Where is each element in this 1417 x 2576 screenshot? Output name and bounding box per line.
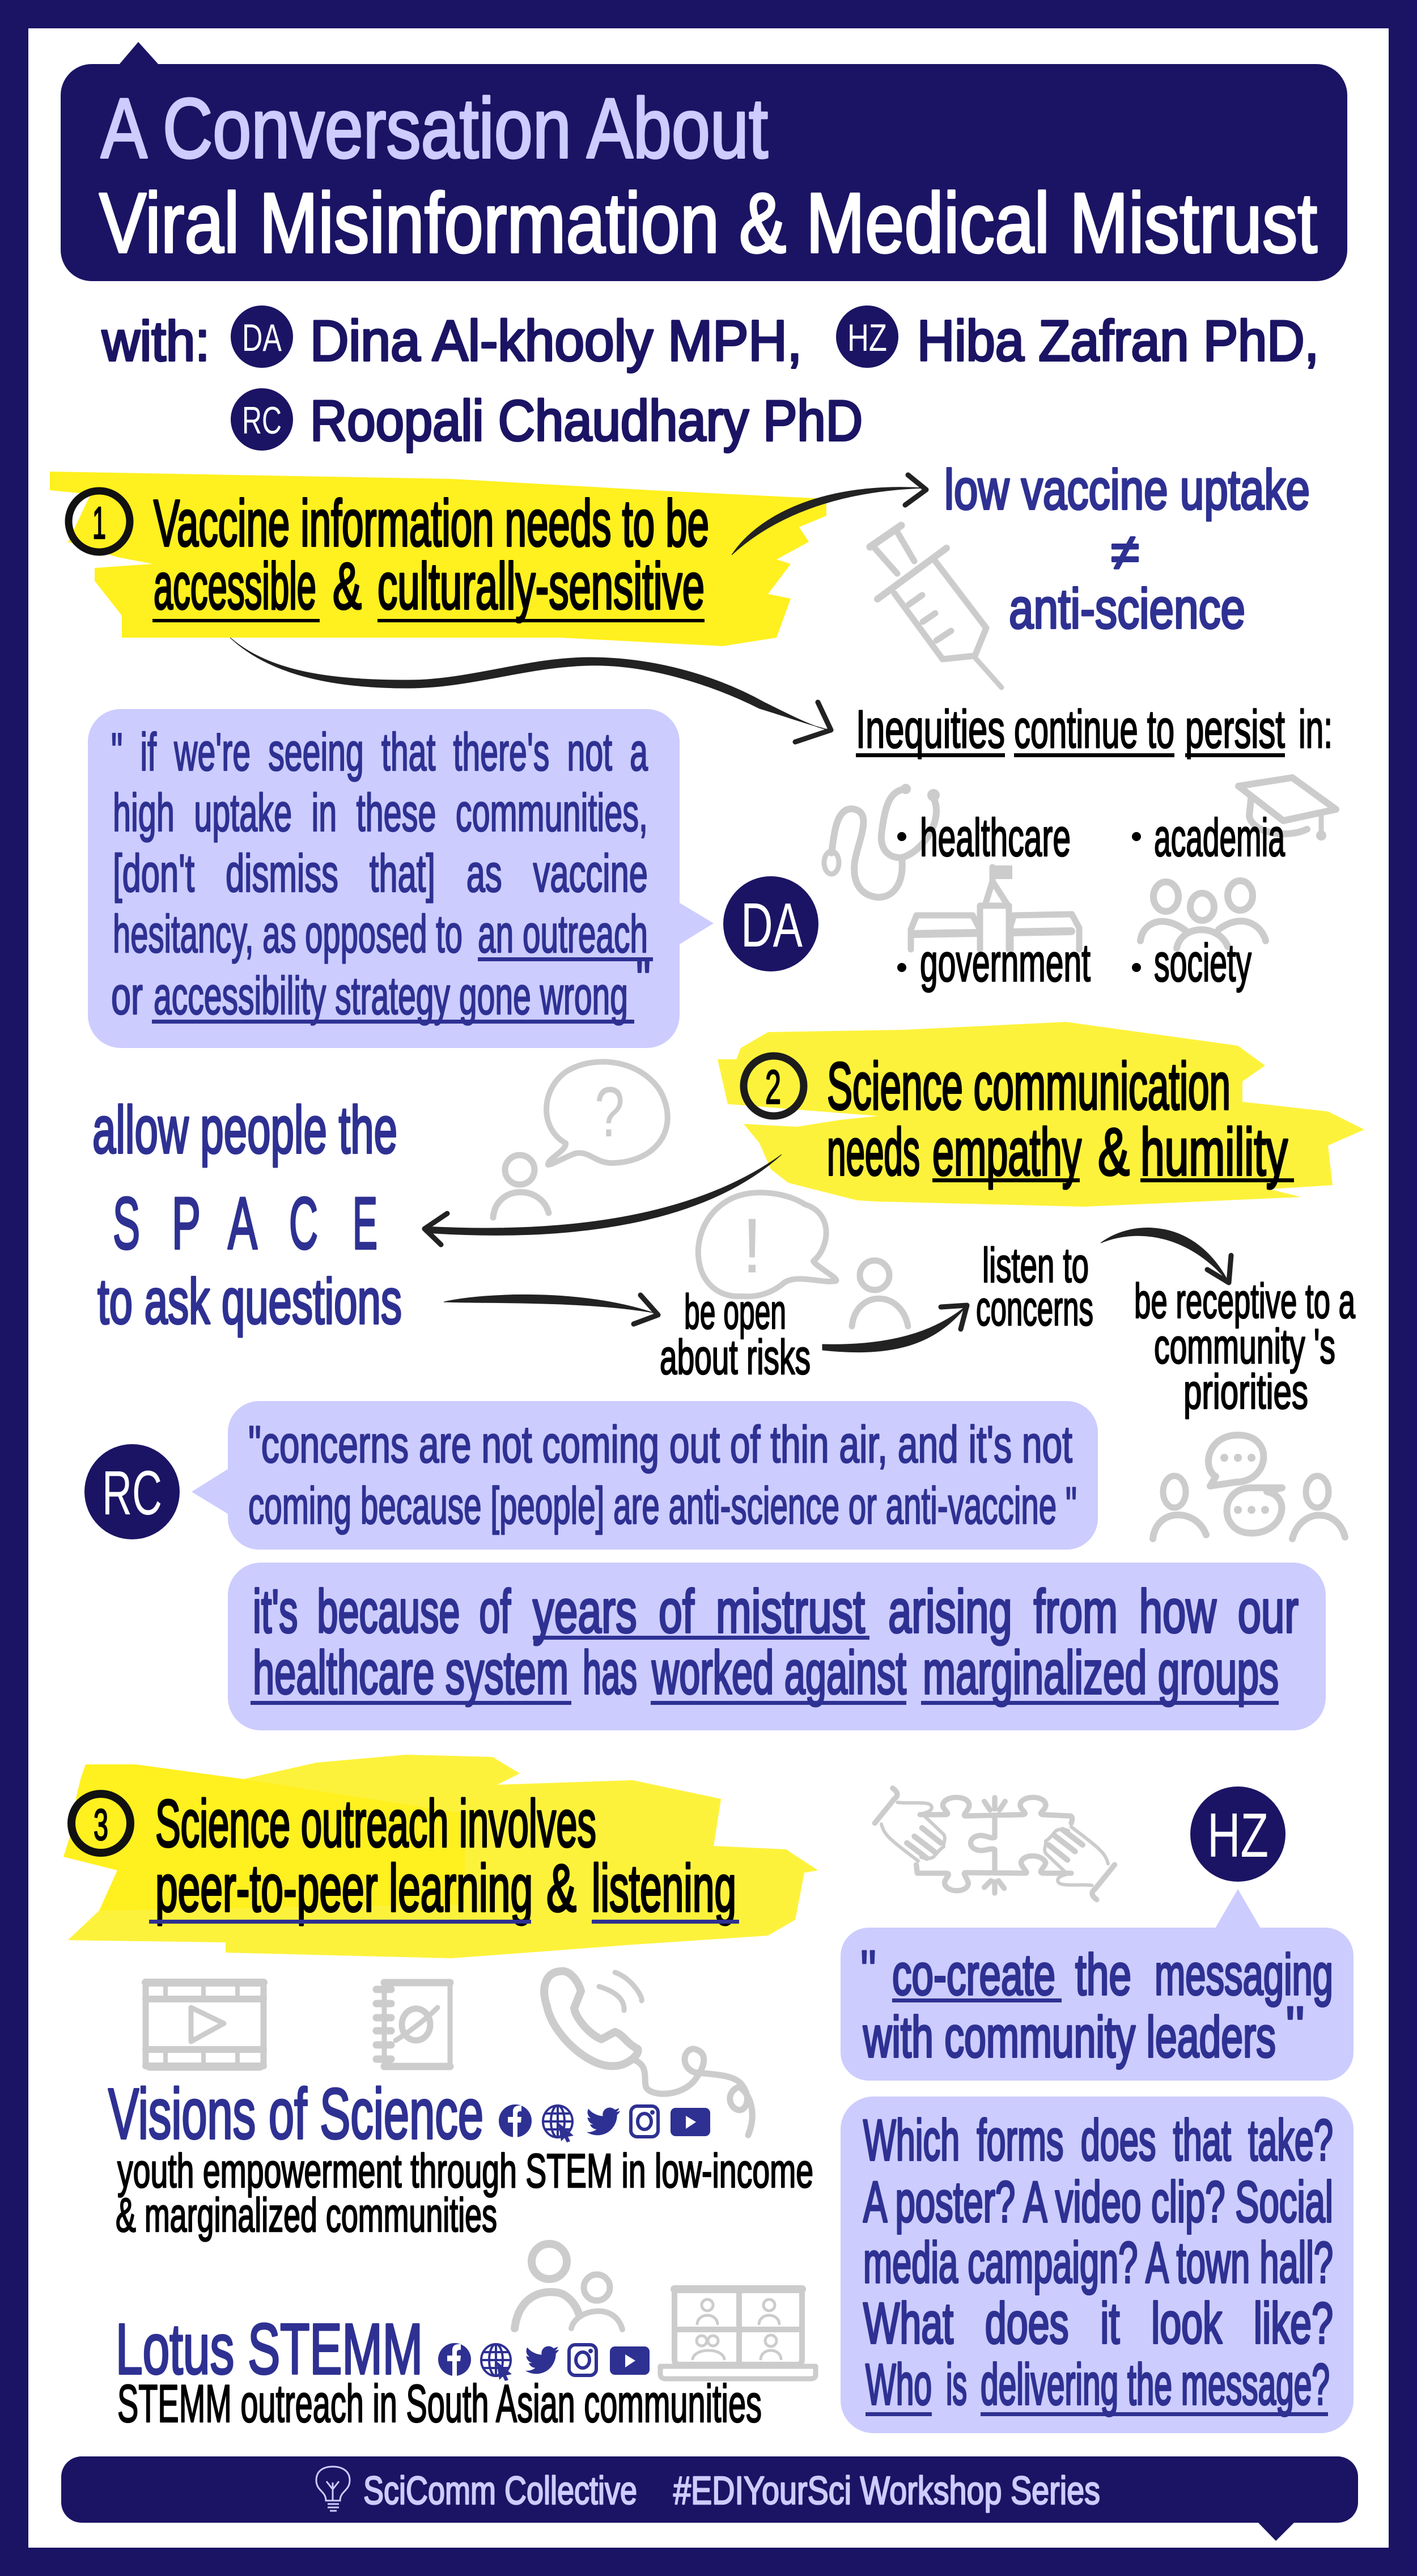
icon: lightbulb <box>316 2467 350 2511</box>
text: receptive to priorities: priorities <box>1183 1365 1308 1419</box>
panel: forms of messaging questions: Who <box>866 2352 932 2417</box>
speaker badge: DA: DA <box>741 890 803 960</box>
heading: inequities: persist <box>1185 699 1285 759</box>
text: receptive to priorities <box>1134 1274 1355 1419</box>
footer banner <box>61 2456 1358 2541</box>
section 3 heading: Science outreach involves <box>155 1786 596 1861</box>
yellow brush highlight <box>63 1755 818 1958</box>
badge: DA <box>231 305 293 368</box>
icon: puzzle hands <box>875 1788 1115 1900</box>
quote panel: Dina: [don't dismiss that] as vaccine <box>113 843 648 903</box>
line: needs empathy and humility: needs <box>827 1115 920 1190</box>
list: inequity areas: healthcare <box>920 808 1071 867</box>
word: SPACE: A <box>228 1182 257 1264</box>
text: Lotus description: STEMM outreach in South Asian communities <box>117 2374 762 2433</box>
line: needs empathy and humility: humility <box>1140 1115 1288 1190</box>
badge: RC <box>231 388 293 451</box>
text: be open about risks: be open <box>684 1285 786 1339</box>
section 2 heading <box>718 1022 1364 1207</box>
panel: years of mistrust: worked against <box>651 1638 906 1707</box>
list: inequity areas: government <box>920 933 1091 992</box>
yellow brush highlight <box>718 1022 1364 1207</box>
icon: syringe <box>870 525 1002 688</box>
icon: exclamation bubble with person: ! <box>742 1203 762 1289</box>
text: allow people the space: to ask questions <box>97 1266 402 1337</box>
speaker badge: RC <box>84 1444 180 1539</box>
panel: years of mistrust: years of mistrust <box>533 1577 865 1645</box>
icon: two people <box>515 2244 622 2329</box>
number badge 2 <box>744 1056 804 1116</box>
quote panel: Roopali: "concerns are not coming out of thin air, and it's not <box>248 1416 1072 1474</box>
icon: community conversation <box>1153 1435 1345 1539</box>
line: needs empathy and humility: empathy <box>932 1115 1081 1190</box>
icon: graduation cap <box>1238 778 1336 841</box>
speaker badge: DA <box>723 876 818 971</box>
icon: government building <box>911 865 1079 949</box>
speakers: with: <box>101 309 210 372</box>
badge: RC: RC <box>242 399 282 442</box>
number badge 3: 3 <box>94 1800 108 1849</box>
heading: inequities: in: <box>1299 699 1333 759</box>
line: accessible and culturally-sensitive <box>154 549 705 623</box>
icon: video player <box>146 1983 264 2068</box>
number badge 3 <box>71 1794 130 1853</box>
yellow brush highlight <box>50 472 826 646</box>
icon: video call laptop <box>660 2288 816 2379</box>
line: accessible and culturally-sensitive: culturally-sensitive <box>377 549 705 623</box>
word: SPACE: P <box>172 1182 201 1264</box>
footer series text: #EDIYourSci Workshop Series <box>673 2468 1100 2513</box>
badge: HZ <box>836 305 898 368</box>
badge: DA: DA <box>242 316 282 359</box>
heading: inequities: continue to <box>1014 699 1174 759</box>
panel: years of mistrust <box>228 1563 1326 1730</box>
quote panel: Dina: hesitancy, as opposed to <box>113 904 463 964</box>
text: listen to concerns: listen to <box>982 1238 1089 1293</box>
quote panel: Dina: or <box>111 966 143 1025</box>
section 3 heading <box>63 1755 818 1958</box>
speakers <box>101 305 1319 453</box>
arrow: to listen to concerns <box>822 1305 967 1352</box>
callout: low uptake is not anti-science: anti-science <box>1009 577 1245 640</box>
text: allow people the space: allow people the <box>92 1093 397 1168</box>
icons: Visions social links <box>499 2104 710 2142</box>
number badge 2: 2 <box>765 1060 781 1114</box>
line: peer-to-peer learning and listening: peer-to-peer learning <box>155 1851 533 1926</box>
list: inequity areas <box>897 808 1285 992</box>
quote panel: Hiba <box>841 1889 1354 2081</box>
list: inequity areas: society <box>1154 933 1251 992</box>
arrow: to community priorities <box>1101 1228 1231 1283</box>
quote panel: Hiba: the <box>1075 1942 1131 2007</box>
panel: forms of messaging questions: is <box>946 2352 967 2417</box>
icon: question bubble with person: ? <box>595 1073 625 1152</box>
line: accessible and culturally-sensitive: & <box>333 549 362 623</box>
quote panel: Hiba: " <box>1286 1995 1305 2059</box>
speaker name: Hiba: Hiba Zafran PhD, <box>917 309 1319 373</box>
line: peer-to-peer learning and listening: & <box>546 1851 576 1926</box>
quote panel: Dina: " <box>636 949 651 1009</box>
speaker badge: HZ <box>1190 1786 1286 1882</box>
title line 1: A Conversation About <box>101 80 768 176</box>
word: SPACE: C <box>289 1182 318 1264</box>
speaker name: Roopali: Roopali Chaudhary PhD <box>310 389 863 453</box>
badge: HZ: HZ <box>847 316 887 359</box>
text: allow people the space <box>92 1093 402 1337</box>
word: SPACE <box>113 1182 377 1264</box>
heading: inequities: Inequities <box>856 699 1005 759</box>
arrow: to be open <box>444 1295 658 1324</box>
heading: Visions of Science: Visions of Science <box>108 2074 483 2154</box>
heading: Lotus STEMM: Lotus STEMM <box>116 2309 423 2389</box>
line: needs empathy and humility: & <box>1098 1115 1130 1190</box>
panel: years of mistrust: it's because of <box>253 1577 511 1645</box>
number badge 1: 1 <box>92 498 106 548</box>
speaker badge: HZ: HZ <box>1207 1801 1268 1870</box>
list: inequity areas: academia <box>1154 808 1285 867</box>
quote panel: Hiba: co-create <box>892 1942 1055 2007</box>
text: listen to concerns: concerns <box>976 1281 1093 1336</box>
quote panel: Dina <box>88 709 714 1048</box>
callout: low uptake is not anti-science: low vaccine uptake <box>944 458 1310 521</box>
text: Visions description: & marginalized communities <box>116 2188 497 2242</box>
number badge 1 <box>69 491 130 552</box>
callout: low uptake is not anti-science <box>944 458 1310 640</box>
section 1 heading: Vaccine information needs to be <box>154 486 709 560</box>
line: accessible and culturally-sensitive: accessible <box>154 549 316 623</box>
panel: years of mistrust: healthcare system <box>253 1638 569 1707</box>
word: SPACE: S <box>113 1182 140 1264</box>
icon: notebook with planet <box>376 1983 450 2066</box>
heading: inequities <box>856 699 1333 759</box>
icon: stethoscope <box>824 784 940 897</box>
quote panel: Dina: accessibility strategy gone wrong <box>154 966 628 1025</box>
speaker badge: RC: RC <box>102 1458 162 1528</box>
speaker name: Dina: Dina Al-khooly MPH, <box>310 309 802 373</box>
icon: society group <box>1140 881 1266 948</box>
line: peer-to-peer learning and listening: listening <box>592 1851 736 1926</box>
text: be open about risks: about risks <box>660 1330 811 1385</box>
callout: low uptake is not anti-science: ≠ <box>1111 524 1139 581</box>
quote panel: Dina: an outreach <box>478 904 648 964</box>
quote panel: Hiba: " <box>860 1938 876 2003</box>
line: needs empathy and humility <box>827 1115 1288 1190</box>
quote panel: Dina: " if we're seeing that there's not a <box>111 722 648 782</box>
icon: telephone <box>544 1971 752 2135</box>
icons: Lotus social links <box>438 2343 650 2381</box>
panel: forms of messaging questions <box>841 2097 1354 2433</box>
word: SPACE: E <box>353 1182 377 1264</box>
icon: exclamation bubble with person <box>698 1192 908 1326</box>
arrow: to inequities <box>230 638 831 742</box>
icon: question bubble with person <box>493 1062 668 1217</box>
quote panel: Roopali <box>192 1401 1098 1550</box>
text: Visions description <box>116 2144 813 2242</box>
text: be open about risks <box>660 1285 811 1385</box>
arrow: to SPACE <box>425 1155 782 1245</box>
title banner <box>61 42 1347 281</box>
quote panel: Dina: high uptake in these communities, <box>113 783 648 842</box>
panel: years of mistrust: has <box>583 1638 637 1707</box>
text: Visions description: youth empowerment through STEM in low-income <box>117 2144 813 2197</box>
text: listen to concerns <box>976 1238 1093 1336</box>
arrow: to low vaccine uptake <box>732 475 926 555</box>
footer text: SciComm Collective <box>363 2468 637 2513</box>
section 1 heading <box>50 472 826 646</box>
